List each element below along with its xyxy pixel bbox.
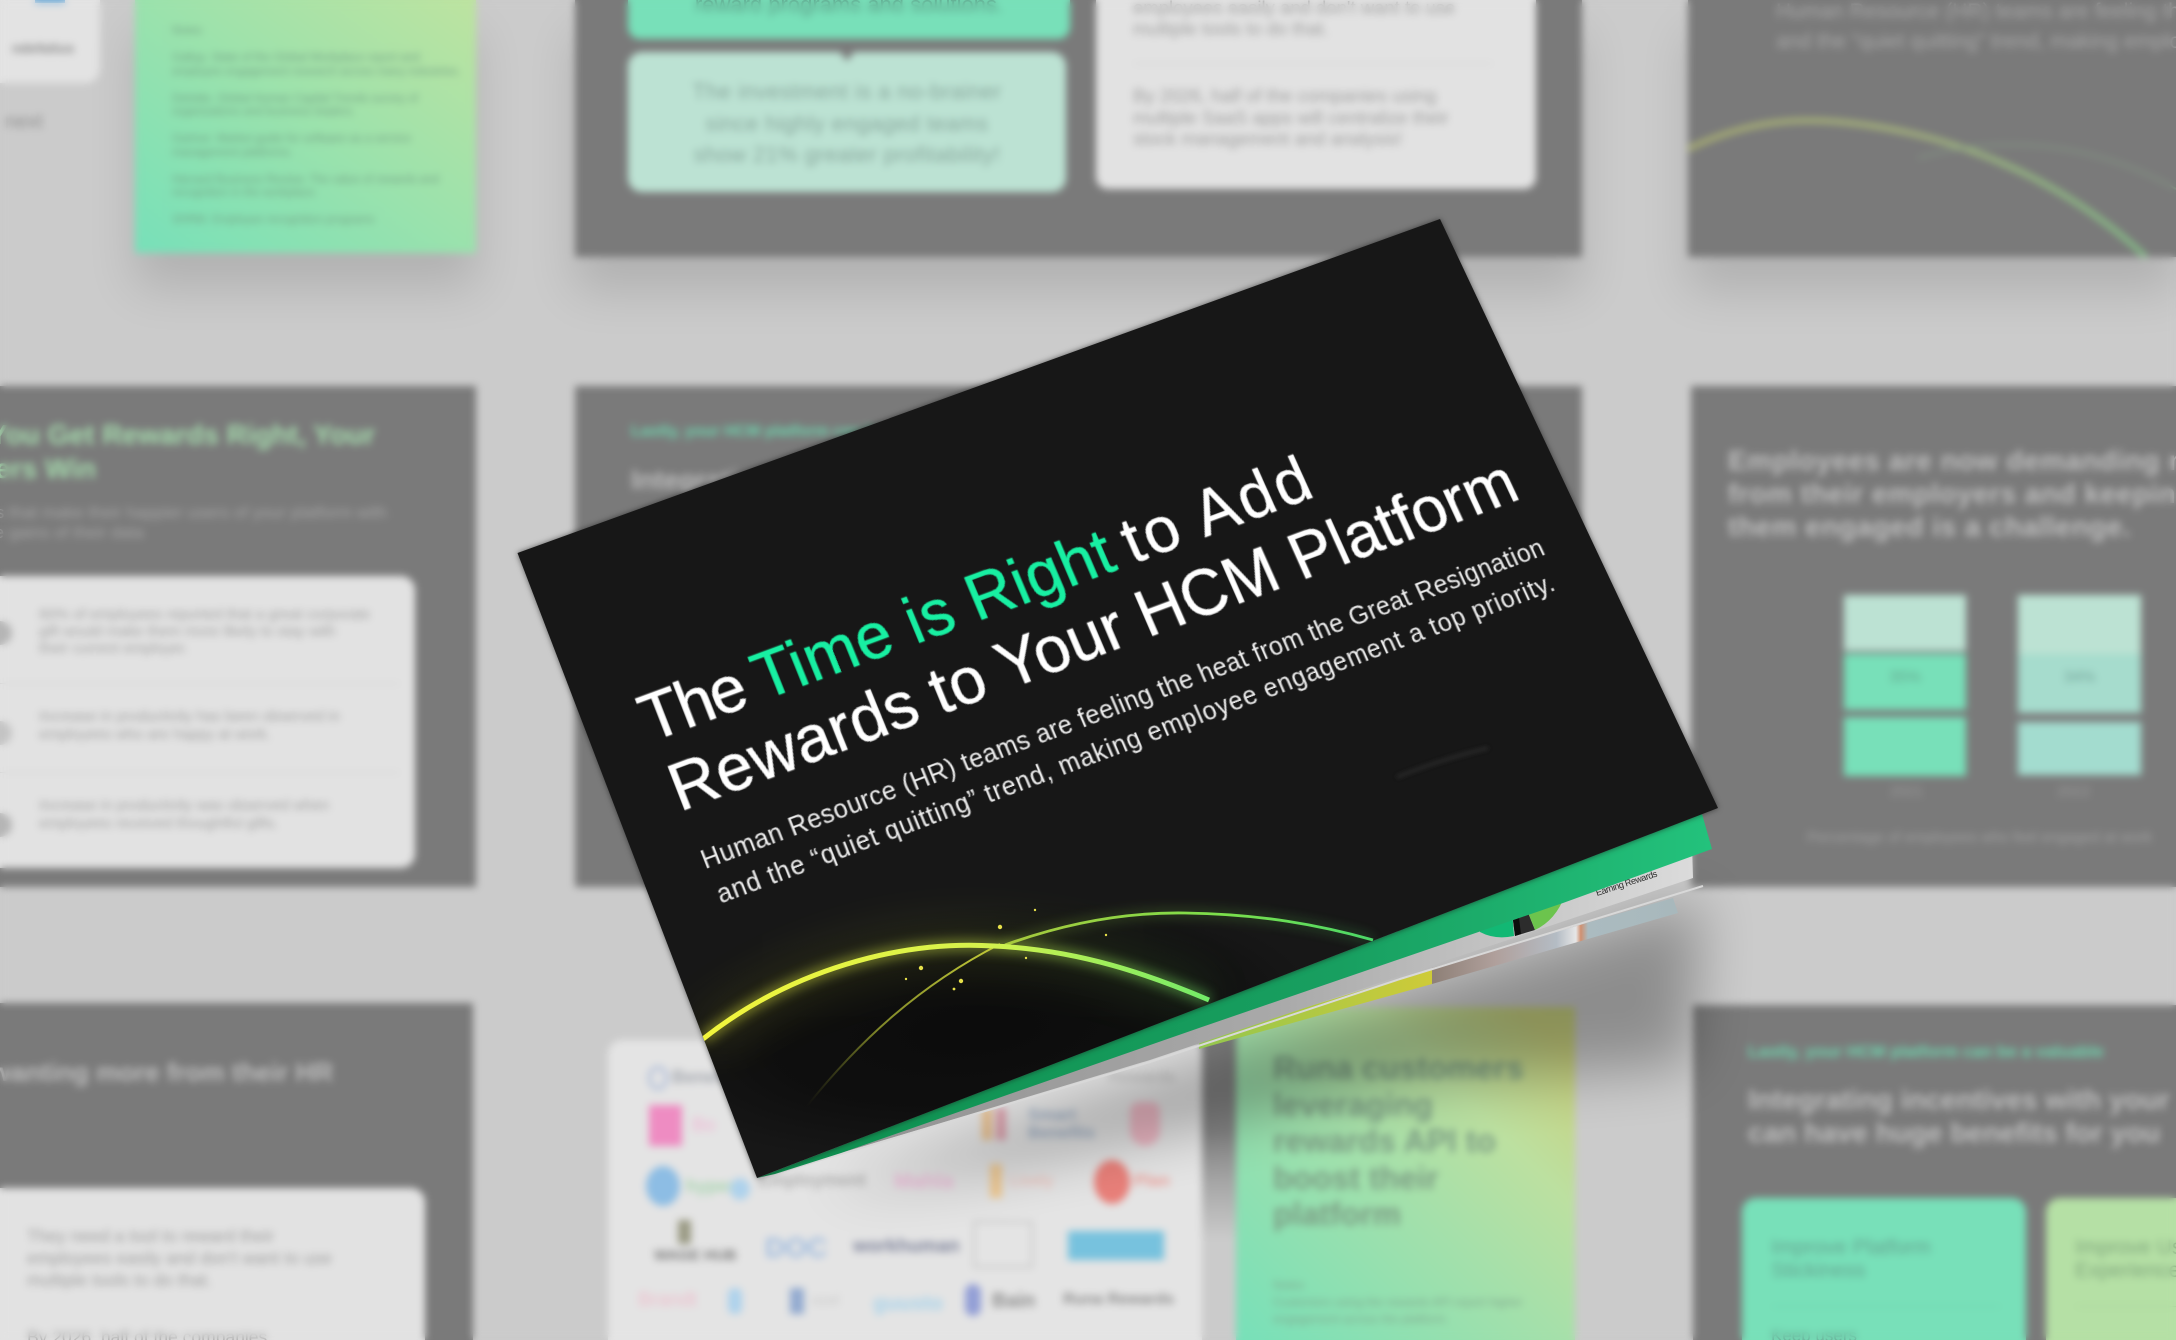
- notes text: Gallup. State of the Global Workplace report and employee engagement research across many industries.: [172, 52, 461, 78]
- card: customer logos: WAGE HUB: [654, 1247, 736, 1264]
- light green callout card: The investment is a no-brainer: [692, 79, 1002, 104]
- white text card: multiple SaaS apps will centralize their: [1133, 106, 1449, 128]
- white text card: By 2026, half of the companies using: [1133, 85, 1436, 106]
- book cast shadow: [862, 884, 1726, 1202]
- subtitle: Human Resource (HR) teams are feeling the heat from the Great Resignation: [681, 536, 1551, 853]
- green inner cover band: [757, 814, 1712, 1178]
- panel: green Runa customers: [1236, 1007, 1575, 1340]
- white stat card: [0, 576, 415, 868]
- eyebrow: Lastly, your HCM platform can be a valuable: [1748, 1042, 2104, 1061]
- white stat card: employees who are happy at work.: [39, 726, 271, 743]
- text fragment: next: next: [5, 111, 43, 133]
- stacked bar chart 2022: [2012, 590, 2146, 780]
- title line 1: [629, 444, 1322, 756]
- brochure with inner pages and cover: [515, 217, 1720, 1181]
- notes: [1273, 1278, 1522, 1326]
- panel: integrating incentives middle: [575, 386, 1582, 887]
- heading: [1726, 445, 2176, 545]
- large statement: leveraging: [1273, 1086, 1433, 1122]
- chart caption: Percentage of employees who feel engaged at work: [1807, 829, 2152, 846]
- card: customer logos: Bain: [992, 1290, 1035, 1312]
- card: customer logos: hyper: [686, 1176, 735, 1196]
- card: customer logos: guusto: [873, 1292, 943, 1315]
- card: customer logos: Benefits: [1028, 1123, 1095, 1142]
- large statement: rewards API to: [1273, 1123, 1496, 1159]
- light green callout card: [628, 52, 1066, 192]
- stacked bar chart 2022: 34%: [2063, 669, 2096, 686]
- chart label 2022: 2022: [2057, 783, 2090, 800]
- card: customer logos: ezel: [812, 1292, 840, 1309]
- white stat card: employees received thoughtful gifts.: [39, 815, 278, 832]
- panel: when you get rewards right: [0, 386, 476, 887]
- card: platform stickiness: [1742, 1198, 2026, 1340]
- heading: can have huge benefits for you: [1748, 1117, 2160, 1148]
- inner page: pie chart: [1480, 895, 1565, 937]
- card: platform stickiness: Improve Platform: [1771, 1236, 1931, 1259]
- panel: employees are demanding: [1691, 386, 2176, 887]
- white stat card: Increase in productivity has been observed in: [39, 708, 340, 725]
- panel: dark cover repeat top-right: [1688, 0, 2176, 257]
- heading: them engaged is a challenge.: [1728, 511, 2131, 542]
- logo row 4: [678, 1220, 691, 1244]
- card: customer logos: Benefits: [672, 1067, 743, 1087]
- logo row 1: [648, 1066, 668, 1090]
- repeat cover subtitle: [1776, 0, 2176, 53]
- notes text: Notes: [172, 25, 202, 37]
- card: customer logos: [608, 1040, 1202, 1340]
- large statement: platform: [1273, 1196, 1401, 1232]
- heading: [1746, 1084, 2176, 1151]
- notes text: SHRM. Employee recognition programs: [172, 214, 375, 226]
- card: customer logos: Plan: [1134, 1171, 1170, 1190]
- light green callout card: since highly engaged teams: [705, 110, 989, 136]
- stacked bar chart 2021: 35%: [1889, 669, 1921, 686]
- chart label 2021: 2021: [1890, 783, 1923, 800]
- card: top-left logo fragment: ndefatius: [12, 40, 74, 56]
- title line 1: The: [623, 646, 748, 744]
- card: customer logos: Employment: [758, 1170, 866, 1190]
- cover glowing arcs: [703, 913, 1373, 1106]
- inner page label: Earning Rewards: Earning Rewards: [1595, 868, 1659, 898]
- card: customer logos: Smart: [1028, 1105, 1076, 1124]
- card: customer logos: workhuman: [853, 1236, 960, 1257]
- white stat card: Increase in productivity was observed when: [39, 797, 329, 814]
- white text card: stock management and analysis!: [1133, 128, 1402, 149]
- white text card: [0, 1188, 425, 1340]
- card: customer logos: Mahla: [894, 1170, 954, 1193]
- notes text: Harvard Business Review. The value of rewards and recognition in the workplace.: [172, 174, 439, 199]
- panel: employees demanding more from HR: [0, 1003, 473, 1340]
- large statement: boost their: [1273, 1160, 1438, 1196]
- cover text in perspective: [623, 449, 1557, 903]
- card: customer logos: Rewards: [1108, 1067, 1175, 1086]
- card: customer logos: DOC: [765, 1232, 827, 1263]
- white stat card: 60% of employees reported that a great corporate: [39, 606, 370, 623]
- logo row 5: Brandt: [638, 1289, 697, 1311]
- panel: dark page with callouts: [575, 0, 1582, 257]
- card: platform stickiness: Stickiness: [1771, 1259, 1866, 1282]
- title line 1: Time is Right: [737, 518, 1123, 705]
- white text card: employees easily and don't want to use: [27, 1248, 332, 1268]
- green callout card: [628, 0, 1070, 39]
- subtitle: and the “quiet quitting” trend, making employee engagement a top priority.: [694, 570, 1557, 884]
- card: top-left logo fragment: [0, 0, 100, 83]
- white stat card: gift would make them more likely to stay with: [39, 623, 336, 640]
- heading: Integrating incentives with your: [631, 465, 1038, 495]
- logo row 2: [649, 1105, 682, 1146]
- white text card: multiple tools to do that.: [1133, 18, 1328, 38]
- white text card: multiple tools to do that.: [27, 1270, 212, 1290]
- cover dark vignette: [698, 956, 1256, 1142]
- large statement: [1271, 1050, 1526, 1234]
- eyebrow: Lastly, your HCM platform can be a valuable: [631, 423, 966, 440]
- white text card: They need a tool to reward their: [27, 1226, 274, 1246]
- repeat cover arcs: [1686, 114, 2176, 260]
- title line 1: to Add: [1115, 449, 1329, 577]
- white text card: [1096, 0, 1536, 189]
- notes text: [172, 25, 461, 226]
- panel: lastly, integrating incentives: [1693, 1005, 2176, 1340]
- cover faint streak: [1397, 748, 1488, 777]
- card: customer logos: Bo: [692, 1115, 715, 1136]
- cover sparks: [905, 909, 1107, 990]
- notes text: Gartner. Market guide for software as a service management platforms.: [172, 133, 411, 158]
- inner page: white sheet: [757, 845, 1703, 1178]
- cover sheet: [518, 219, 1718, 1178]
- card: customer logos: Lively: [1010, 1171, 1053, 1190]
- panel: green notes top: [135, 0, 476, 253]
- notes text: Deloitte. Global Human Capital Trends survey of organizations and business leaders.: [172, 92, 418, 118]
- notes: Notes: [1273, 1278, 1304, 1292]
- white stat card: their current employer.: [39, 640, 188, 657]
- shadow strip beside logo card: [1202, 1000, 1236, 1240]
- notes: Customers using the rewards API report higher engagement across the platform.: [1273, 1295, 1522, 1326]
- card: user experience: [2046, 1198, 2176, 1340]
- title line 2: Rewards to Your HCM Platform: [648, 451, 1537, 808]
- large statement: Runa customers: [1273, 1050, 1524, 1086]
- light green callout card: show 21% greater profitability!: [693, 142, 1001, 167]
- logo row 3: [646, 1166, 680, 1206]
- card: customer logos: Runa Rewards: [1063, 1291, 1174, 1308]
- inner page: photo strip: [1199, 898, 1678, 1049]
- callout notch: [840, 52, 854, 61]
- stacked bar chart 2021: [1838, 590, 1972, 782]
